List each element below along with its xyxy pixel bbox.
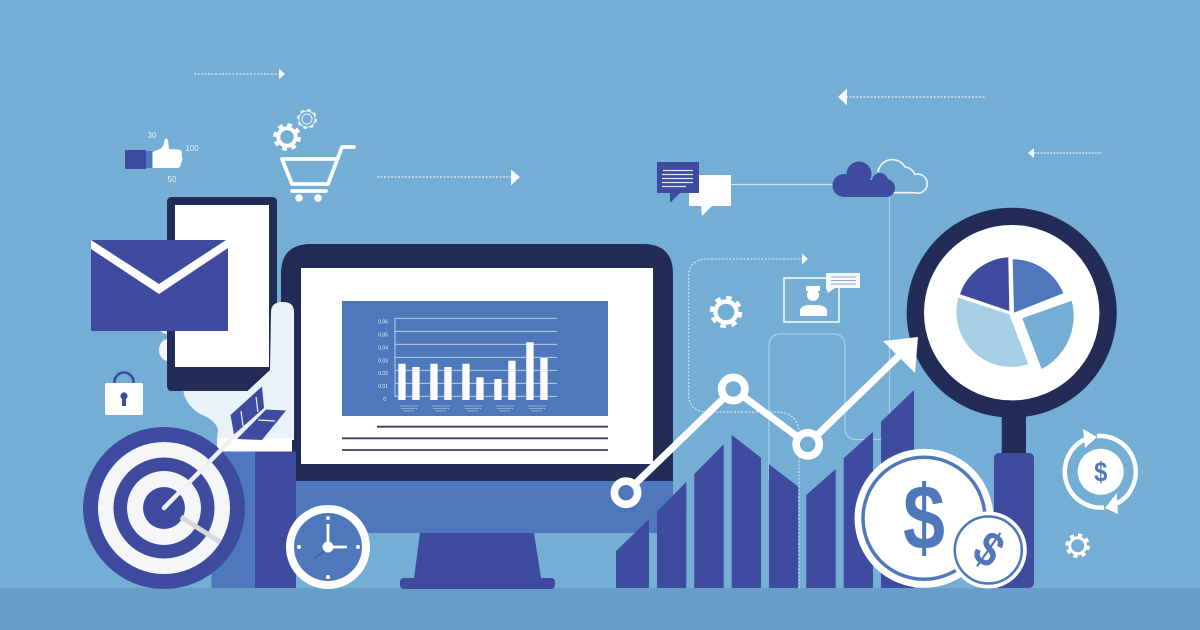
small dollar coin: $: [964, 520, 1014, 579]
monitor chin: [296, 481, 673, 533]
envelope: [91, 240, 228, 331]
chart axis labels: 0.05: [378, 332, 388, 338]
connector: chat to cloud: [731, 184, 835, 186]
icon: thumbs up with counts: 100: [185, 144, 199, 153]
icon: chat bubbles: [657, 162, 731, 216]
chart axis labels: 0.04: [378, 346, 388, 352]
icon: profile frame with speech bubble: [784, 273, 860, 322]
large dollar coin: [854, 449, 994, 588]
small dollar coin: [950, 512, 1027, 588]
arrow: far right dotted: [1028, 148, 1102, 158]
icon: recycling dollar: $: [1094, 456, 1108, 488]
chart grid lines: [395, 318, 557, 397]
monitor: [281, 244, 673, 481]
chart panel: [342, 301, 608, 416]
chart axis labels: 0: [383, 397, 386, 403]
chart axis labels: 0.01: [378, 384, 388, 390]
icon: thumbs up with counts: 50: [168, 175, 177, 184]
chart category label marks: [400, 406, 546, 411]
icon: solid cloud: [832, 162, 895, 197]
connector: cloud vertical line and rounded outline: [769, 197, 890, 480]
arrow feathers: [230, 386, 264, 434]
bar chart: rising columns: [616, 390, 914, 588]
chart axis labels: [378, 320, 388, 403]
chart bars: [398, 342, 548, 400]
icon: large gear above cart: [275, 125, 299, 149]
icon: thumbs up with counts: 30: [148, 131, 157, 140]
arrow: middle left dotted: [377, 170, 520, 186]
floor band: [0, 588, 1200, 630]
icon: recycling dollar: [1065, 429, 1136, 514]
pie chart: [956, 257, 1074, 369]
icon: thumbs up with counts: [125, 131, 199, 184]
chart axis labels: 0.06: [378, 320, 388, 326]
arrow: top left dotted: [194, 68, 285, 80]
text lines under chart: [342, 427, 608, 450]
icon: shopping cart: [282, 147, 354, 202]
cuff: [217, 438, 292, 452]
icon: gear centre: [712, 298, 740, 326]
target: [83, 427, 245, 589]
sleeve: [212, 452, 296, 588]
magnifying glass: [907, 208, 1117, 588]
magnifier handle: [1002, 410, 1026, 460]
icon: small outline gear: [298, 110, 316, 128]
large dollar coin: $: [903, 466, 945, 569]
hand thumb: [240, 302, 294, 440]
dotted route arrow: [688, 254, 808, 588]
icon: padlock: [105, 372, 143, 415]
hand palm: [183, 380, 292, 440]
magnifier lens: [907, 208, 1117, 418]
icon: outline cloud: [878, 160, 927, 193]
icon: gear bottom right: [1067, 535, 1088, 556]
monitor stand: [400, 533, 555, 589]
line chart: rising trend arrow: [614, 337, 918, 504]
icon: clock: [286, 505, 370, 589]
phone: [167, 197, 277, 391]
arrow: top right dotted: [838, 88, 985, 106]
arrow in target: [164, 386, 286, 508]
hand fingers: [159, 324, 177, 361]
chart axis labels: 0.03: [378, 358, 388, 364]
chart axis labels: 0.02: [378, 371, 388, 377]
arrow shadow: [181, 517, 220, 542]
